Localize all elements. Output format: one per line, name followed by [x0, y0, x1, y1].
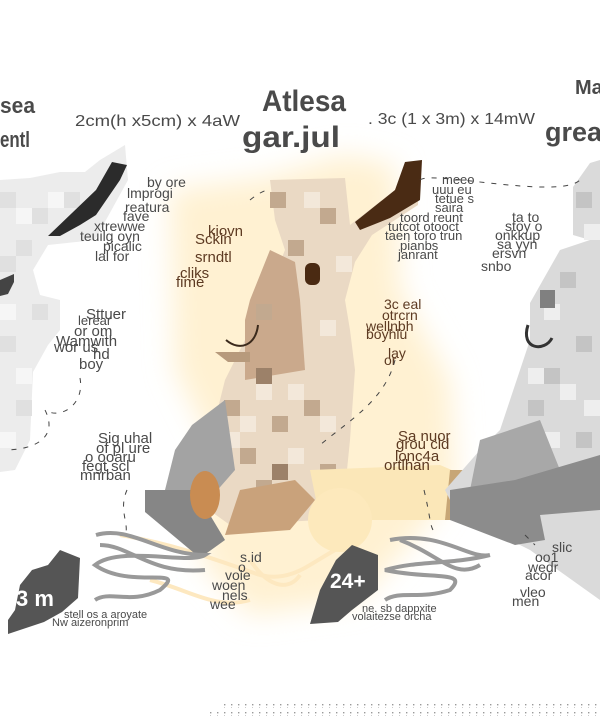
left dark badge: 3 m: [16, 586, 54, 611]
text block: lower center wheel note: [209, 549, 262, 612]
text block: left feature 3: of pl ure: [96, 440, 150, 457]
text block: left feature 2: Sttuer: [86, 306, 126, 323]
left gray rope: [95, 533, 205, 600]
caption: left badge: [52, 609, 147, 629]
text block: left feature 1: lmprogi: [127, 185, 173, 201]
caption: center badge: volaitezse orcha: [352, 611, 432, 623]
right gray sheep: [445, 160, 600, 600]
text block: right feature 1: uuu eu: [432, 182, 472, 197]
text block: lower right wheel note: wedr: [527, 559, 559, 575]
text block: lower right wheel note: [512, 539, 572, 609]
text block: right feature 1: taen toro trun: [385, 228, 462, 243]
text block: right feature 2: ersvn: [492, 245, 526, 261]
text block: left feature 1: teuilg oyn: [80, 228, 140, 244]
text block: left feature 1: by ore: [147, 174, 186, 190]
text block: center feature 3: [384, 428, 451, 474]
text block: center feature 3: grou cld: [396, 436, 449, 453]
text block: center feature 2: wellnbh: [365, 318, 413, 334]
heading: center: [242, 85, 346, 154]
text block: left feature 1: [80, 174, 186, 264]
dashed leader lines: [5, 178, 580, 545]
text block: left feature 1: fave: [123, 208, 150, 224]
text block: lower right wheel note: men: [512, 593, 539, 609]
center sheep halo: [170, 155, 455, 615]
text block: left feature 1: picalic: [103, 238, 142, 254]
left dark badge: [8, 550, 80, 634]
text block: left feature 1: reatura: [125, 199, 170, 215]
text block: left feature 3: mnrban: [80, 467, 131, 484]
text block: center feature: cliks: [180, 265, 209, 282]
text block: center feature: Sckin: [195, 231, 232, 248]
text block: left feature 2: boy: [79, 356, 104, 373]
text block: right feature 1: tutcot otooct: [388, 219, 459, 234]
text block: lower center wheel note: s.id: [240, 549, 262, 565]
text block: center feature: fime: [176, 274, 204, 291]
gray base: [145, 490, 225, 558]
text block: lower right wheel note: oo1: [535, 549, 559, 565]
text block: left feature 2: [53, 306, 126, 373]
text block: right feature 2: sa yyn: [497, 236, 537, 252]
center sheep ear: [355, 160, 422, 230]
heading: left: sea: [0, 93, 36, 118]
subhead: right: . 3c (1 x 3m) x 14mW: [368, 111, 536, 128]
text block: right feature 1: pianbs: [400, 238, 439, 253]
text block: left feature 2: hd: [93, 346, 110, 363]
cream rope: [120, 535, 360, 603]
heading: center: Atlesa: [262, 85, 346, 118]
text block: center feature: [176, 223, 243, 291]
caption: left badge: stell os a aroyate: [64, 609, 147, 621]
text block: right feature 1: tetue s: [435, 191, 475, 206]
heading: left: entl: [0, 127, 30, 152]
caption: center badge: [352, 603, 437, 623]
text block: right feature 1: meeo: [442, 172, 475, 187]
text block: center feature 3: Sa nuor: [398, 428, 451, 445]
text block: lower center wheel note: woen: [211, 577, 245, 593]
text block: center feature 2: lay: [388, 345, 406, 361]
heading: left: [0, 93, 36, 152]
text block: left feature 2: or om: [74, 323, 112, 340]
caption: left badge: Nw aizeronprim: [52, 617, 128, 629]
text block: right feature 2: stoy o: [505, 218, 543, 234]
center sheep: [145, 160, 422, 558]
text block: left feature 3: Sig uhal: [98, 430, 152, 447]
center gray rope: [385, 538, 490, 600]
text block: center feature: srndtl: [195, 249, 232, 266]
text block: left feature 3: fegt scl: [82, 458, 130, 475]
left gray sheep: [0, 145, 128, 472]
dot pattern: [210, 704, 600, 720]
text block: lower right wheel note: vleo: [520, 584, 546, 600]
text block: center feature 2: [365, 296, 421, 368]
subhead: left: 2cm(h x5cm) x 4aW: [75, 113, 241, 130]
left sheep nose: [0, 274, 14, 296]
text block: right feature 1: saira: [435, 200, 464, 215]
text block: right feature 2: onkkup: [495, 227, 540, 243]
text block: center feature 2: otrcrn: [382, 307, 418, 323]
text block: lower center wheel note: wee: [209, 596, 236, 612]
orange leg: [190, 471, 220, 519]
text block: right feature 2: ta to: [512, 209, 539, 225]
gray shoulder: [165, 400, 235, 510]
center sheep eye: [305, 263, 320, 285]
text block: left feature 1: xtrewwe: [94, 218, 146, 234]
text block: right feature 2: snbo: [481, 258, 512, 274]
text block: right feature 2: [481, 209, 543, 274]
text block: left feature 2: wor us: [53, 339, 98, 356]
text block: center feature 2: boyhlu: [366, 326, 407, 342]
text block: center feature 3: lonc4a: [395, 448, 440, 465]
text block: left feature 2: Wamwith: [56, 333, 117, 350]
text block: lower center wheel note: nels: [222, 587, 248, 603]
heading: center: gar.jul: [242, 121, 340, 154]
text block: lower right wheel note: acor: [525, 567, 553, 583]
heading: right: [545, 77, 600, 147]
text block: lower center wheel note: voie: [225, 567, 251, 583]
text block: left feature 3: o ooaru: [85, 449, 136, 466]
text block: center feature 3: ortlhan: [384, 457, 430, 474]
text block: right feature 1: toord reunt: [400, 210, 463, 225]
text block: right feature 1: janrant: [397, 247, 438, 262]
text block: lower right wheel note: slic: [552, 539, 572, 555]
left sheep ear: [48, 162, 127, 236]
text block: center feature 2: 3c eal: [384, 296, 421, 312]
center sheep mouth: [226, 325, 258, 346]
text block: right feature 1: [385, 172, 475, 262]
caption: center badge: ne. sb dappxite: [362, 603, 437, 615]
right sheep mouth: [526, 325, 552, 347]
text block: left feature 3: [80, 430, 152, 484]
text block: left feature 1: lal for: [95, 248, 130, 264]
text block: lower center wheel note: o: [238, 559, 246, 575]
text block: center feature: kiovn: [208, 223, 243, 240]
center dark badge: 24+: [330, 570, 366, 593]
text block: left feature 2: lerear: [78, 313, 112, 328]
center dark badge: [310, 545, 378, 624]
center wood base: [310, 465, 475, 520]
text block: center feature 2: or: [384, 352, 397, 368]
